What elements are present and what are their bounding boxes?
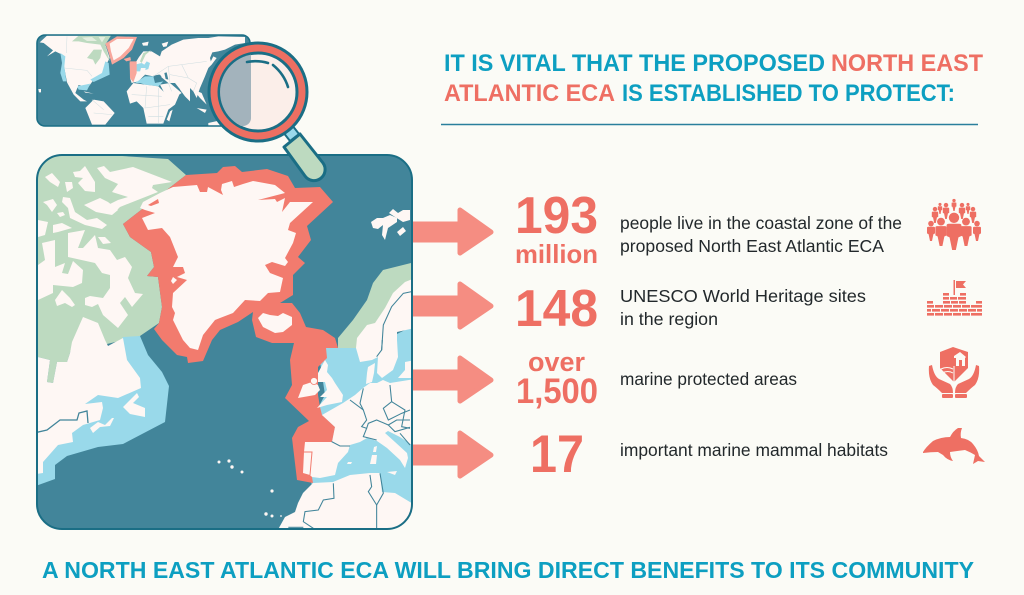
Norway green zone [338,262,415,350]
handle connector [283,125,299,141]
European seas blue zone [310,325,415,508]
description: coastal population: people live in the coastal zone of the [620,213,902,233]
Greenland [140,181,313,350]
heading: ATLANTIC ECA [444,80,615,107]
stat: 148: 148 [515,280,598,338]
lens [219,53,297,131]
magnifying glass [208,42,327,182]
Americas [38,36,149,125]
lens highlight [247,61,288,87]
heading rule [441,124,978,126]
North America coastal blue zone [30,336,169,488]
Iceland [258,313,292,333]
arrow: 17 [412,433,491,476]
stat: over 1,500: 1,500 [516,372,598,411]
description: coastal population [620,213,902,256]
Svalbard [371,209,410,240]
stat: 17: 17 [530,425,584,484]
country borders [288,340,410,528]
stat: over 1,500 [516,347,598,411]
stat: 193 million [515,187,598,269]
US-Canada border [38,410,89,433]
proposed ECA salmon zone [123,166,338,483]
lens shaded portion [220,54,251,126]
description: UNESCO sites: in the region [620,309,718,329]
heading: IS ESTABLISHED TO PROTECT: [622,80,955,107]
Old world [127,36,245,126]
description: coastal population: proposed North East Atlantic ECA [620,236,885,256]
description: UNESCO sites [620,286,866,329]
European land [275,278,415,535]
icon: brick wall with flag [927,280,982,316]
arrows [412,210,491,476]
icon: dolphin [923,428,985,464]
Portugal outline [304,452,312,475]
arrow: over 1,500 [412,358,491,401]
stat: 193 million: million [515,239,598,269]
stat: 193 million: 193 [515,187,598,245]
description: marine protected areas: marine protected areas [620,369,797,389]
Canadian Arctic green zone [30,150,186,383]
main map panel [30,150,415,535]
lens ring [209,43,307,141]
stat: over 1,500: over [528,347,585,377]
heading: NORTH EAST [831,50,983,77]
Atlantic islands [218,459,282,518]
icon: people [927,199,981,250]
heading [444,50,983,107]
description: UNESCO sites: UNESCO World Heritage sites [620,286,866,306]
footer statement: A NORTH EAST ATLANTIC ECA WILL BRING DIRECT BENEFITS TO ITS COMMUNITY [42,557,974,583]
handle [284,134,325,181]
heading: IT IS VITAL THAT THE PROPOSED [444,50,825,77]
Canadian islands and North American land [30,166,172,475]
icon: hands protecting shield [929,347,979,398]
arrow: 193 million [412,210,491,253]
arrow: 148 [412,284,491,327]
description: marine mammal habitats: important marine mammal habitats [620,440,888,460]
inset world map [37,35,250,126]
